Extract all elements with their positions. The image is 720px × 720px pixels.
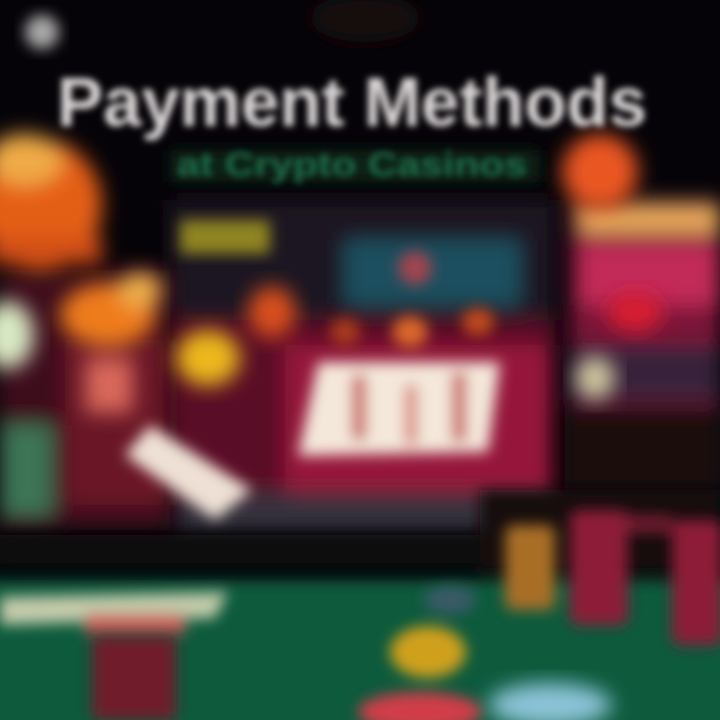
- subtitle: at Crypto Casinos: [177, 146, 527, 184]
- icon: yellow crown piece: [358, 586, 482, 720]
- icon: pale sphere right: [575, 356, 615, 400]
- panel: white strip on table: [0, 592, 228, 634]
- icon: orange mushroom: [60, 272, 162, 413]
- icon: yellow dome: [176, 330, 240, 386]
- icon: yellow label: [180, 220, 270, 254]
- icon: orange balloon top right: [562, 134, 638, 210]
- panel: green table: [0, 490, 720, 720]
- icon: chip stacks: [505, 510, 720, 645]
- panel: left dark red column: [0, 270, 170, 530]
- panel: right side screen: [565, 200, 720, 490]
- icon: red cup: [92, 636, 176, 720]
- icon: orange dot: [248, 286, 296, 338]
- title: Payment Methods: [57, 63, 647, 141]
- icon: blue chip: [488, 683, 612, 720]
- icon: faint top emblem: [310, 0, 420, 42]
- icon: top left white logo: [25, 15, 59, 49]
- callout: white big figure: [298, 362, 500, 456]
- icon: red spot on right screen: [607, 292, 663, 332]
- panel: central screen: [170, 200, 555, 532]
- icon: orange burger dome: [0, 134, 102, 271]
- icon: small orange dots row: [330, 251, 494, 348]
- icon: white card: [125, 425, 252, 520]
- icon: pale green circle: [0, 301, 34, 369]
